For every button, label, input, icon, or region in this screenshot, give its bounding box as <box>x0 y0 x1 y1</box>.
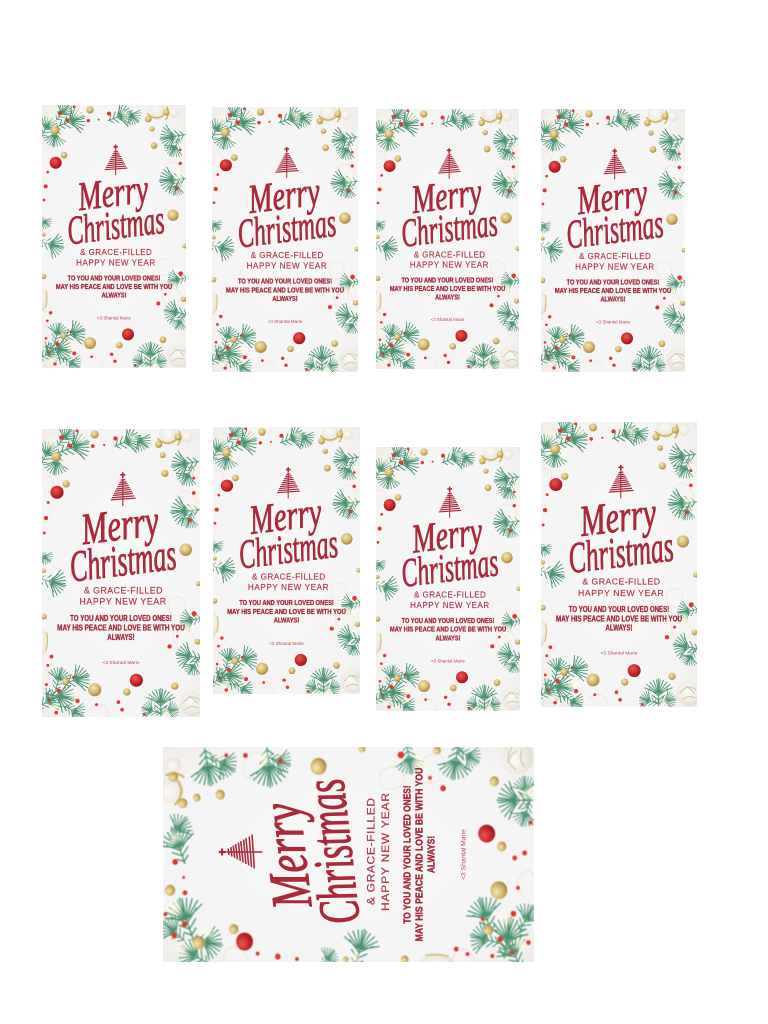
message: TO YOU AND YOUR LOVED ONES! <box>569 605 669 614</box>
signature: <3 Shantal Marie <box>601 650 638 655</box>
card decoration: pine and baubles <box>365 440 526 720</box>
icon: tree <box>604 149 626 179</box>
subheading: & GRACE-FILLED <box>366 798 378 905</box>
signature: <3 Shantal Marie <box>461 829 468 880</box>
heading: Merry Christmas <box>248 776 372 928</box>
subheading: & GRACE-FILLED <box>414 250 485 259</box>
icon: tree <box>111 472 136 506</box>
subheading <box>248 572 329 592</box>
card decoration: pine and baubles <box>365 102 525 378</box>
card 5 <box>30 421 207 727</box>
message: ALWAYS! <box>605 624 633 633</box>
message: ALWAYS! <box>274 616 299 625</box>
heading: Merry Christmas <box>399 508 501 596</box>
subheading: & GRACE-FILLED <box>414 591 486 600</box>
message <box>226 277 344 303</box>
subheading: HAPPY NEW YEAR <box>410 601 489 610</box>
message <box>402 767 438 941</box>
message <box>555 277 671 304</box>
message: MAY HIS PEACE AND LOVE BE WITH YOU <box>226 285 344 294</box>
heading: Merry Christmas: Christmas <box>398 200 500 256</box>
message: ALWAYS! <box>101 291 126 300</box>
heading: Merry Christmas: Merry <box>408 169 484 222</box>
subheading: HAPPY NEW YEAR <box>578 588 664 598</box>
message <box>56 273 172 300</box>
card decoration: pine and baubles <box>530 102 691 381</box>
heading: Merry Christmas <box>398 169 500 256</box>
heading: Merry Christmas <box>236 489 340 577</box>
icon: tree <box>276 147 299 178</box>
subheading: HAPPY NEW YEAR <box>248 583 329 592</box>
heading: Merry Christmas: Christmas <box>235 199 338 256</box>
message: ALWAYS! <box>600 295 625 304</box>
signature: <3 Shantal Marie <box>596 319 631 324</box>
subheading: HAPPY NEW YEAR <box>575 262 654 271</box>
heading: Merry Christmas <box>67 495 179 592</box>
signature: <3 Shantal Marie <box>431 317 465 322</box>
signature: <3 Shantal Marie <box>268 319 303 324</box>
message: MAY HIS PEACE AND LOVE BE WITH YOU <box>556 614 682 623</box>
icon: tree <box>219 835 262 868</box>
heading: Merry Christmas: Christmas <box>564 201 666 257</box>
icon: tree <box>105 145 127 175</box>
card 6 <box>201 420 366 703</box>
message: TO YOU AND YOUR LOVED ONES! <box>401 275 494 284</box>
heading: Merry Christmas: Merry <box>75 166 152 219</box>
subheading: & GRACE-FILLED <box>579 252 651 261</box>
heading: Merry Christmas: Merry <box>78 495 162 554</box>
subheading <box>410 591 489 610</box>
message: MAY HIS PEACE AND LOVE BE WITH YOU <box>57 623 185 632</box>
card decoration: pine and baubles <box>31 98 192 377</box>
message: ALWAYS! <box>435 633 460 642</box>
heading: Merry Christmas <box>65 166 167 253</box>
message: TO YOU AND YOUR LOVED ONES! <box>402 616 494 625</box>
message: ALWAYS! <box>272 294 298 303</box>
card decoration: pine and baubles <box>30 421 207 727</box>
card 7 <box>365 440 526 720</box>
heading: Merry Christmas: Merry <box>245 168 323 222</box>
card 9: rotated landscape <box>153 738 547 979</box>
message: TO YOU AND YOUR LOVED ONES! <box>567 277 659 286</box>
subheading: HAPPY NEW YEAR <box>247 262 327 271</box>
subheading: & GRACE-FILLED <box>84 585 162 595</box>
card 8 <box>529 414 704 717</box>
message: TO YOU AND YOUR LOVED ONES! <box>68 273 160 282</box>
signature: <3 Shantal Marie <box>97 315 132 320</box>
subheading: & GRACE-FILLED <box>582 577 660 587</box>
message: ALWAYS! <box>435 292 460 301</box>
message: MAY HIS PEACE AND LOVE BE WITH YOU <box>227 607 346 616</box>
message: TO YOU AND YOUR LOVED ONES! <box>239 598 334 607</box>
message <box>390 275 505 301</box>
message: ALWAYS! <box>107 633 135 642</box>
heading: Merry Christmas: Christmas <box>236 520 340 577</box>
subheading: HAPPY NEW YEAR <box>410 261 489 270</box>
subheading <box>247 251 327 271</box>
message: MAY HIS PEACE AND LOVE BE WITH YOU <box>56 282 172 291</box>
icon: tree <box>438 148 461 179</box>
heading: Merry Christmas: Christmas <box>292 776 372 928</box>
message <box>57 614 185 642</box>
signature: <3 Shantal Marie <box>431 658 466 663</box>
message <box>556 605 682 633</box>
message <box>227 598 346 625</box>
heading: Merry Christmas <box>564 170 666 257</box>
message: TO YOU AND YOUR LOVED ONES! <box>402 785 413 924</box>
subheading <box>410 250 489 270</box>
subheading <box>76 248 155 267</box>
heading: Merry Christmas: Merry <box>248 799 324 913</box>
subheading <box>575 252 654 271</box>
card decoration: pine and baubles <box>200 100 364 381</box>
heading: Merry Christmas: Christmas <box>65 197 167 253</box>
subheading: HAPPY NEW YEAR <box>76 258 155 267</box>
message: TO YOU AND YOUR LOVED ONES! <box>238 277 332 286</box>
signature: <3 Shantal Marie <box>102 660 140 666</box>
subheading: & GRACE-FILLED <box>251 251 324 260</box>
heading: Merry Christmas: Christmas <box>566 522 676 583</box>
heading: Merry Christmas: Merry <box>574 170 651 223</box>
subheading <box>79 585 166 607</box>
card 1 <box>31 98 192 377</box>
subheading: HAPPY NEW YEAR <box>381 793 392 911</box>
card decoration: pine and baubles <box>529 414 704 717</box>
message: ALWAYS! <box>426 836 438 873</box>
message: MAY HIS PEACE AND LOVE BE WITH YOU <box>390 625 506 634</box>
card decoration: pine and baubles <box>153 738 547 979</box>
subheading: HAPPY NEW YEAR <box>79 597 166 607</box>
message: MAY HIS PEACE AND LOVE BE WITH YOU <box>555 286 671 295</box>
subheading: & GRACE-FILLED <box>252 572 325 581</box>
signature: <3 Shantal Marie <box>269 641 304 646</box>
subheading <box>366 793 392 911</box>
card 2 <box>200 100 364 381</box>
heading: Merry Christmas <box>566 488 676 583</box>
message: MAY HIS PEACE AND LOVE BE WITH YOU <box>390 284 505 293</box>
heading: Merry Christmas <box>235 168 338 256</box>
heading: Merry Christmas: Christmas <box>67 529 179 592</box>
heading: Merry Christmas: Christmas <box>399 539 501 596</box>
heading: Merry Christmas: Merry <box>576 488 659 546</box>
message: MAY HIS PEACE AND LOVE BE WITH YOU <box>414 767 425 941</box>
message <box>390 616 506 642</box>
icon: tree <box>609 465 633 498</box>
message: TO YOU AND YOUR LOVED ONES! <box>70 614 172 623</box>
card 4 <box>530 102 691 381</box>
icon: tree <box>277 467 300 498</box>
icon: tree <box>439 487 461 518</box>
subheading: & GRACE-FILLED <box>80 248 152 257</box>
heading: Merry Christmas: Merry <box>246 489 325 543</box>
heading: Merry Christmas: Merry <box>409 508 485 562</box>
card 3 <box>365 102 525 378</box>
card decoration: pine and baubles <box>201 420 366 703</box>
subheading <box>578 577 664 598</box>
